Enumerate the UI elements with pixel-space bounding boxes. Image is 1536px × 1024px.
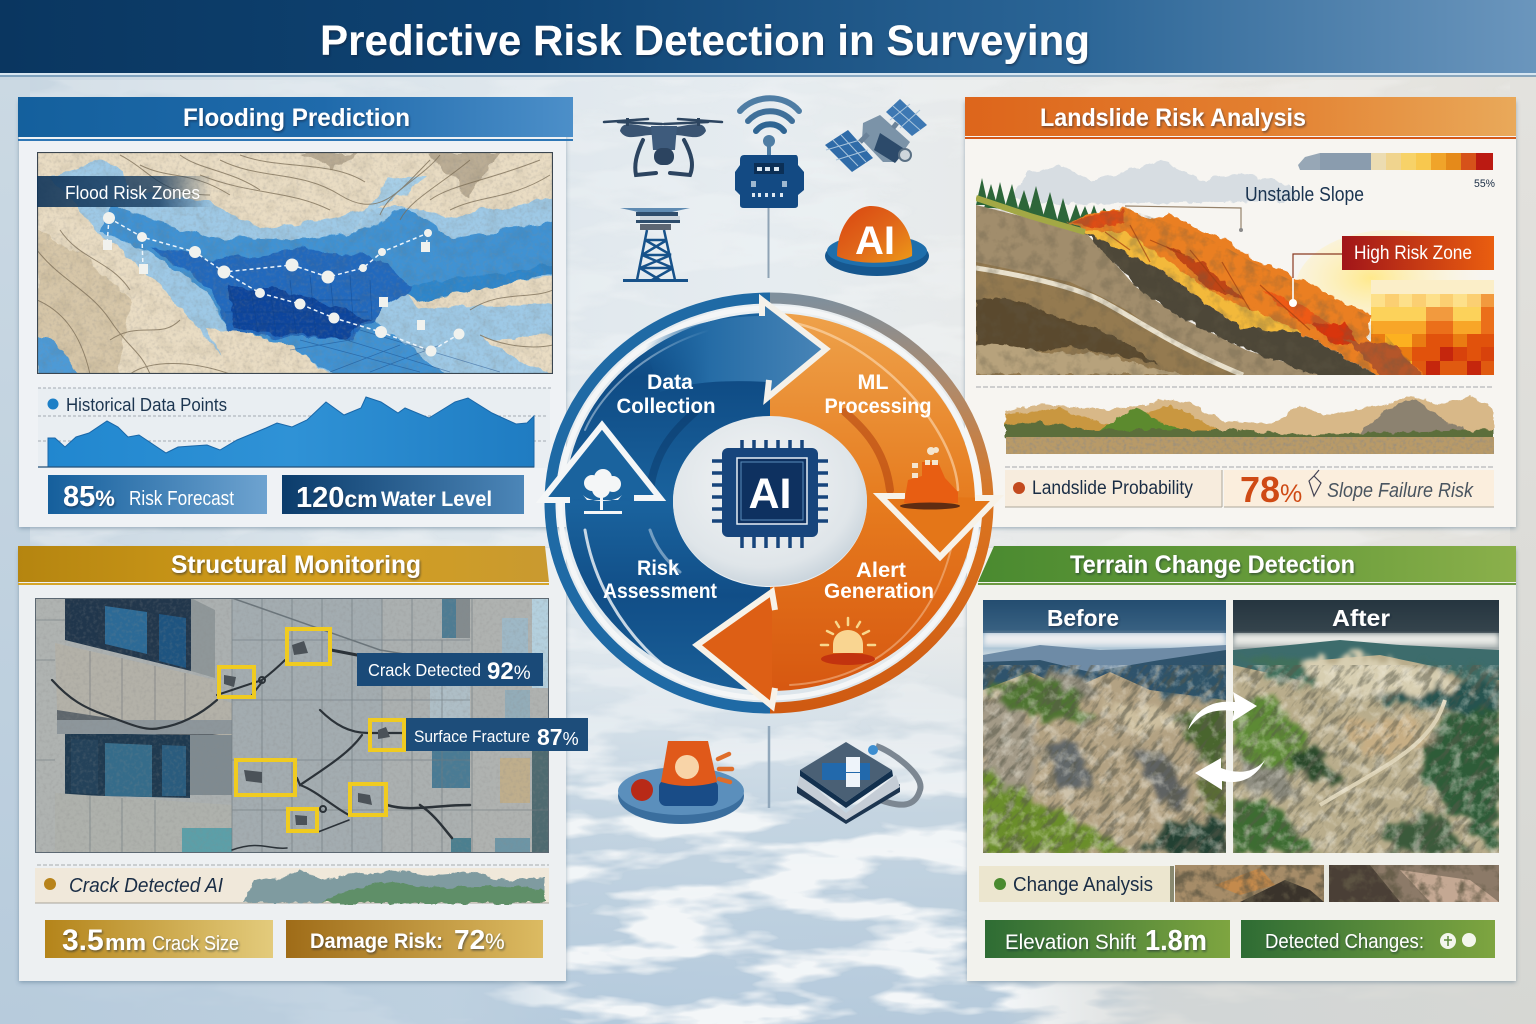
chart: historical data points [38, 388, 553, 468]
heading: landslide risk analysis: Landslide Risk Analysis [1040, 104, 1306, 132]
stat: 120 cm water level: 120cm [296, 482, 378, 514]
stat: detected changes: Detected Changes: [1265, 930, 1424, 953]
title: Predictive Risk Detection in Surveying [320, 17, 1090, 65]
icon: drone [604, 118, 722, 175]
stat: 3.5 mm crack size: Crack Size [152, 933, 239, 955]
stat: damage risk 72%: 72% [454, 924, 505, 955]
step label: data collection: Data [647, 371, 693, 394]
icon: ai dome: AI [855, 219, 895, 263]
stat: 78% slope failure risk: Slope Failure Risk [1327, 480, 1474, 502]
label: landslide probability [1005, 470, 1222, 507]
heading: flooding prediction [18, 97, 573, 141]
stat: 120 cm water level [282, 475, 524, 514]
step label: ml processing [824, 371, 932, 418]
step label: alert generation: Alert [856, 559, 906, 582]
step label: data collection [616, 371, 716, 418]
stat: 85% risk forecast [48, 475, 267, 514]
callout: surface fracture 87% [406, 718, 588, 751]
icon: survey tower [620, 208, 690, 282]
stat: 85% risk forecast: Risk Forecast [129, 488, 234, 510]
icon: swap arrows [1188, 692, 1265, 790]
building photo with cracks [35, 598, 549, 853]
arrow: ml processing to alert generation [880, 496, 997, 557]
callout: surface fracture 87%: Surface Fracture [414, 728, 530, 746]
stat: 120 cm water level: Water Level [381, 488, 492, 511]
ring segment: blue half [565, 313, 770, 690]
step label: risk assessment [603, 557, 717, 603]
step label: alert generation [824, 559, 934, 603]
icon: ai chip [712, 440, 828, 548]
aerial image strips [1175, 865, 1499, 902]
step label: data collection: Collection [616, 395, 716, 418]
central lifecycle diagram [542, 298, 997, 708]
step label: ml processing: Processing [824, 395, 932, 418]
chart: historical data points: Historical Data Points [66, 395, 227, 415]
stat: 85% risk forecast: 85% [63, 481, 115, 513]
trees [976, 178, 1112, 228]
ring core [673, 416, 867, 586]
photo: after [1233, 600, 1499, 853]
arrow: alert generation to risk assessment [697, 592, 775, 706]
stat: 78% slope failure risk [1224, 469, 1494, 510]
label: landslide probability: Landslide Probability [1032, 478, 1193, 499]
label: crack detected ai: Crack Detected AI [69, 875, 223, 897]
ring segment: orange half [770, 314, 975, 691]
icon: ai chip: AI [748, 470, 792, 518]
panel: terrain change detection [964, 546, 1518, 985]
icon: processing plant [900, 447, 960, 510]
panel: structural monitoring [18, 546, 588, 981]
callout: high risk zone: High Risk Zone [1354, 242, 1472, 264]
arrow: risk assessment to data collection [542, 425, 660, 500]
stat: elevation shift 1.8m: Elevation Shift [1005, 931, 1136, 954]
stat: 3.5 mm crack size [45, 920, 273, 958]
label: flood risk zones: Flood Risk Zones [65, 182, 200, 203]
heading: terrain change detection [978, 546, 1516, 585]
step label: ml processing: ML [858, 371, 889, 394]
outer ring rim [550, 298, 988, 708]
icon: wireless sensor [735, 98, 804, 278]
icon: processor with cable [797, 742, 920, 824]
step label: risk assessment: Assessment [603, 580, 717, 603]
heading: flooding prediction: Flooding Prediction [183, 104, 410, 132]
stat: elevation shift 1.8m: 1.8m [1145, 925, 1207, 957]
legend: risk colour scale: 55% [1474, 178, 1495, 190]
heading: structural monitoring: Structural Monitoring [171, 551, 421, 579]
stat: 3.5 mm crack size: 3.5 [62, 924, 104, 957]
stat: damage risk 72% [286, 920, 543, 958]
landscape strip [1006, 396, 1494, 454]
stat: elevation shift 1.8m [985, 920, 1230, 958]
stat: detected changes [1241, 920, 1495, 958]
label: crack detected ai [35, 868, 549, 903]
callout: crack detected 92%: 92% [487, 658, 531, 685]
stat: 3.5 mm crack size: mm [105, 930, 146, 955]
title banner [0, 0, 1536, 77]
heading: landslide risk analysis [965, 97, 1516, 139]
label: unstable slope: Unstable Slope [1245, 184, 1364, 206]
stat: damage risk 72%: Damage Risk: [310, 930, 443, 953]
label: after: After [1332, 605, 1390, 631]
step label: alert generation: Generation [824, 580, 934, 603]
callout: crack detected 92% [357, 653, 543, 686]
icon: alert bell [821, 618, 875, 665]
icon: alarm beacon [618, 726, 769, 824]
photo: before [983, 600, 1226, 853]
callout: high risk zone [1289, 236, 1494, 307]
slope cross-section illustration [976, 153, 1495, 378]
label: before: Before [1047, 605, 1119, 631]
label: flood risk zones [37, 176, 212, 207]
heading: structural monitoring [18, 546, 549, 585]
callout: crack detected 92%: Crack Detected [368, 660, 481, 680]
icon: cloud and tree [583, 469, 622, 514]
panel: flooding prediction [18, 97, 573, 527]
arrow: data collection to ml processing [645, 300, 826, 398]
icon: satellite [825, 99, 927, 172]
inner highlights [585, 322, 958, 685]
label: change analysis: Change Analysis [1013, 874, 1153, 896]
label: change analysis [979, 865, 1499, 902]
flood risk map [37, 152, 560, 380]
panel: landslide risk analysis [965, 97, 1516, 527]
heat map cells [1371, 280, 1494, 375]
icon: ai dome [825, 206, 929, 276]
heading: terrain change detection: Terrain Change Detection [1070, 551, 1355, 579]
stat: 78% slope failure risk: 78% [1240, 469, 1302, 510]
legend: risk colour scale [1298, 153, 1495, 190]
step label: risk assessment: Risk [637, 557, 679, 580]
callout: surface fracture 87%: 87% [537, 724, 579, 750]
